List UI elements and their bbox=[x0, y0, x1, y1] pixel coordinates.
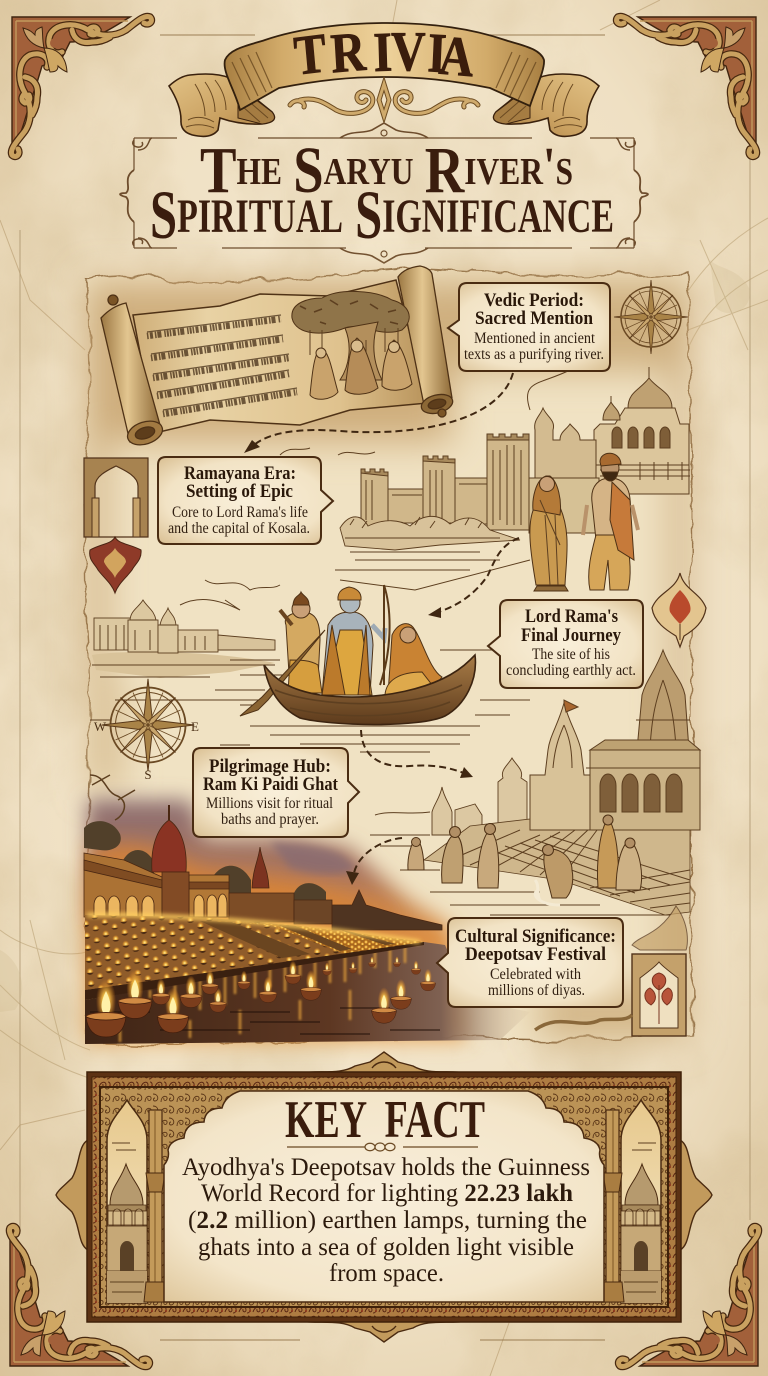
body: Celebrated with bbox=[490, 966, 581, 983]
hull bbox=[264, 655, 475, 724]
corner ornament: top left bbox=[11, 16, 151, 156]
main temple bbox=[530, 650, 700, 830]
title: trivia: TRIVIA bbox=[292, 20, 476, 89]
left roller bbox=[101, 295, 166, 449]
fort and palace of Ayodhya sketch bbox=[280, 367, 690, 590]
route arrow: ramayana to final journey bbox=[428, 538, 519, 618]
body line 2: concluding earthly act. bbox=[506, 662, 636, 679]
compass rose: upper right bbox=[614, 280, 688, 354]
woman figure bbox=[530, 476, 568, 591]
fort walls and towers bbox=[361, 434, 599, 533]
ghat steps with lamps bbox=[85, 915, 424, 990]
heading line 2: Deepotsav Festival bbox=[465, 944, 606, 965]
route arrow: vedic to ramayana bbox=[244, 373, 513, 453]
parchment toning bbox=[88, 280, 688, 1038]
Sita bbox=[385, 624, 442, 700]
body line 2: millions of diyas. bbox=[488, 982, 585, 999]
heading line 1: iver's bbox=[464, 136, 573, 196]
red motif centre bbox=[104, 548, 126, 578]
corner ornament: bottom left bbox=[9, 1227, 149, 1367]
bathers and worshippers bbox=[408, 815, 642, 898]
corner ornament: bottom right bbox=[619, 1227, 759, 1367]
arch ornament bbox=[84, 458, 148, 537]
steps bbox=[424, 812, 690, 915]
ripples bbox=[215, 650, 530, 752]
route arrow: pilgrimage to deepotsav bbox=[346, 838, 402, 885]
heading line 1: R bbox=[425, 134, 465, 207]
key fact body text: Ayodhya's Deepotsav holds the Guinness bbox=[182, 1154, 590, 1181]
Rama bbox=[322, 587, 385, 695]
heading: Vedic Period: bbox=[484, 290, 584, 311]
filigree band bbox=[92, 1077, 676, 1317]
trees behind palace bbox=[84, 821, 326, 905]
heading: Pilgrimage Hub: bbox=[209, 756, 331, 777]
sanskrit script lines (decorative) bbox=[147, 315, 297, 414]
title frame bbox=[120, 123, 648, 263]
ribbon right tail bbox=[494, 74, 599, 136]
man figure bbox=[583, 453, 638, 590]
trivia ribbon banner bbox=[169, 20, 599, 136]
callout: cultural significance bbox=[437, 918, 623, 1007]
distant buildings bbox=[432, 758, 527, 838]
right niche with temple bbox=[601, 1100, 661, 1303]
heading: Ramayana Era: bbox=[184, 463, 296, 484]
compass letter S: S bbox=[144, 767, 152, 782]
palace bbox=[535, 367, 690, 494]
bushes and river bank bbox=[340, 516, 520, 550]
heading line 2: Sacred Mention bbox=[475, 308, 593, 329]
compass letter W: W bbox=[94, 719, 107, 734]
parchment sheet bbox=[84, 270, 693, 1044]
paddle bbox=[240, 630, 325, 716]
body line 2: and the capital of Kosala. bbox=[168, 520, 310, 537]
key fact body text: (2.2 million) earthen lamps, turning the bbox=[188, 1207, 587, 1234]
key fact body text: World Record for lighting 22.23 lakh bbox=[201, 1180, 573, 1207]
boat with Rama, Sita and Lakshmana bbox=[215, 585, 530, 752]
river lines bbox=[370, 812, 670, 915]
heading line 2: ignificance bbox=[382, 171, 614, 247]
divider bbox=[287, 1143, 478, 1151]
right roller bbox=[398, 266, 455, 417]
heading line 1: T bbox=[200, 134, 237, 207]
key fact body text: ghats into a sea of golden light visible bbox=[198, 1234, 574, 1261]
corner ornament: top right bbox=[617, 16, 757, 156]
route arrow: final journey to pilgrimage bbox=[361, 730, 473, 778]
body line 2: baths and prayer. bbox=[221, 811, 319, 828]
key fact body text: from space. bbox=[329, 1260, 444, 1287]
heading line 2: Ram Ki Paidi Ghat bbox=[203, 774, 339, 795]
floating diyas bbox=[86, 956, 436, 1037]
right floral motif bbox=[652, 573, 706, 647]
water bbox=[85, 942, 530, 1044]
heading line 1: he bbox=[237, 136, 293, 196]
ornamental lower right tile bbox=[535, 906, 687, 1036]
heading line 1: S bbox=[293, 134, 324, 207]
outer frame bbox=[87, 1072, 681, 1322]
heading line 2: piritual bbox=[177, 171, 355, 247]
body: Core to Lord Rama's life bbox=[172, 504, 308, 521]
heading line 2: Final Journey bbox=[521, 625, 621, 646]
sky bbox=[87, 800, 466, 1042]
temple ghat sketch bbox=[370, 650, 700, 915]
body line 2: texts as a purifying river. bbox=[464, 346, 604, 363]
left riverside town sketch bbox=[90, 580, 285, 745]
heading: Cultural Significance: bbox=[455, 926, 616, 947]
callout: pilgrimage hub bbox=[193, 748, 359, 837]
body: Millions visit for ritual bbox=[206, 795, 333, 812]
Sita and Rama walking bbox=[530, 453, 638, 591]
heading line 1: aryu bbox=[324, 136, 425, 196]
Lakshmana bbox=[280, 592, 322, 693]
key fact heading: KEY FACT bbox=[285, 1091, 485, 1149]
compass rose: lower left bbox=[94, 679, 199, 782]
scroll sheet bbox=[133, 280, 428, 433]
body: The site of his bbox=[532, 646, 610, 663]
heading: Lord Rama's bbox=[525, 606, 618, 627]
compass letter E: E bbox=[191, 719, 199, 734]
key fact body text bbox=[182, 1154, 590, 1287]
ribbon left tail bbox=[169, 74, 274, 136]
panel: key fact ornate frame bbox=[56, 1052, 712, 1342]
callout: vedic period bbox=[448, 283, 610, 371]
title panel: decorative frame and heading bbox=[120, 123, 648, 263]
body: Mentioned in ancient bbox=[474, 330, 596, 347]
heading line 2: S bbox=[150, 177, 177, 253]
callout: ramayana era bbox=[158, 457, 333, 544]
panel: torn parchment timeline map bbox=[84, 266, 706, 1044]
red floral motif bbox=[90, 537, 141, 593]
palace with dome and spires bbox=[84, 805, 442, 930]
scroll flourish under banner bbox=[290, 84, 478, 116]
water reflections bbox=[120, 945, 405, 1042]
inner frame line bbox=[100, 1087, 668, 1307]
branch ornament bbox=[90, 775, 135, 820]
sunset diya scene bbox=[84, 800, 530, 1044]
side ornaments bbox=[56, 1052, 712, 1342]
bow bbox=[380, 585, 390, 685]
callout: lord rama's final journey bbox=[488, 600, 643, 688]
manuscript scroll with banyan and sages bbox=[101, 266, 455, 449]
heading line 2: Setting of Epic bbox=[186, 481, 293, 502]
banyan tree bbox=[292, 291, 409, 380]
seated sages bbox=[310, 338, 412, 399]
ribbon main band bbox=[225, 23, 544, 110]
heading line 2: S bbox=[355, 177, 382, 253]
left niche with temple bbox=[107, 1100, 167, 1303]
cream text area bbox=[164, 1091, 604, 1302]
